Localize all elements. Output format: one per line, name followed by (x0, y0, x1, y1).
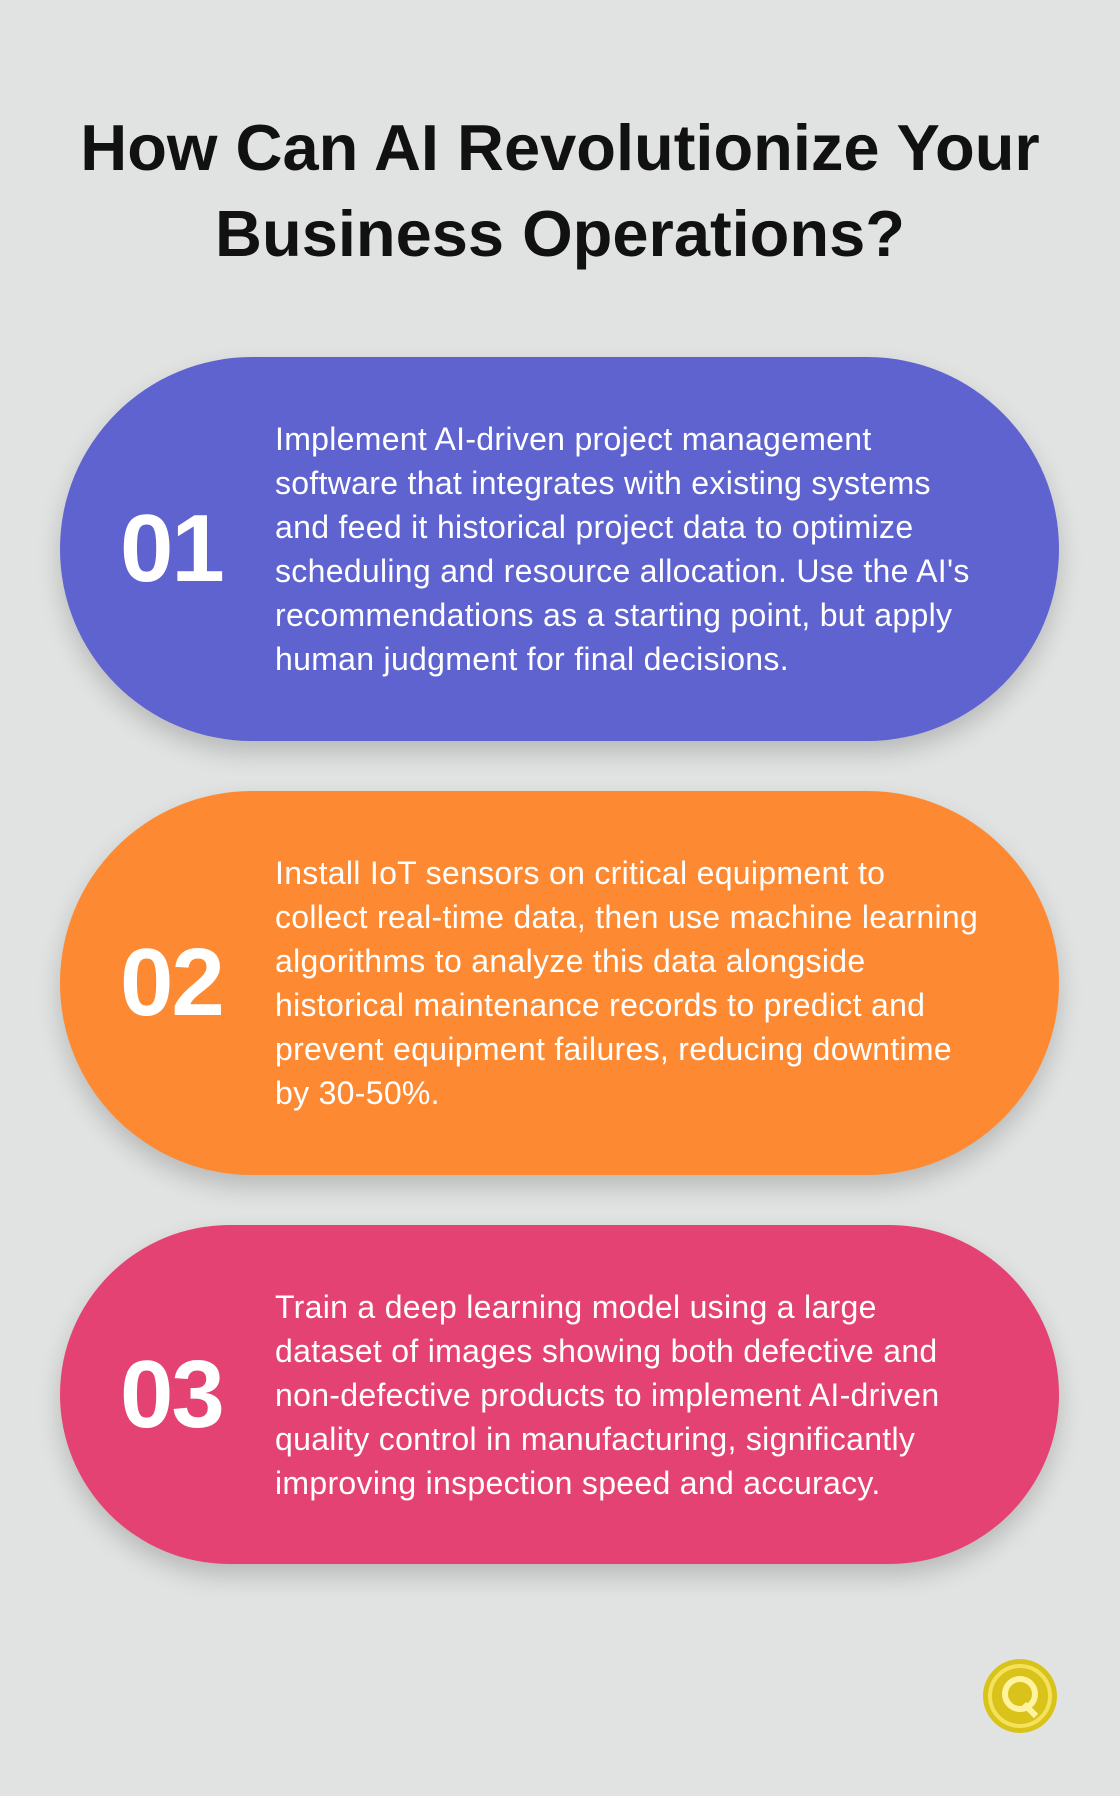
text 03: dataset of images showing both defective and (275, 1332, 938, 1368)
text 01: recommendations as a starting point, but apply (275, 597, 952, 633)
number 01: 01 (120, 495, 223, 602)
text 02: by 30-50%. (275, 1075, 440, 1111)
text 01: human judgment for final decisions. (275, 641, 789, 677)
panel: step 02 (60, 791, 1059, 1175)
text 02: Install IoT sensors on critical equipment to (275, 855, 885, 891)
title: Business Operations? (215, 197, 905, 270)
text 02: collect real-time data, then use machine learning (275, 899, 978, 935)
text 01: Implement AI-driven project management (275, 421, 872, 457)
text 03 (275, 1288, 940, 1500)
text 02: prevent equipment failures, reducing downtime (275, 1031, 952, 1067)
number 03: 03 (120, 1340, 223, 1448)
text 03: improving inspection speed and accuracy. (275, 1464, 881, 1500)
text 02: historical maintenance records to predict and (275, 987, 925, 1023)
icon: logo (983, 1659, 1057, 1733)
number 02: 02 (120, 929, 223, 1036)
title (80, 111, 1040, 270)
panel: step 03 (60, 1225, 1059, 1564)
text 01 (275, 421, 970, 677)
title: How Can AI Revolutionize Your (80, 111, 1040, 184)
text 03: quality control in manufacturing, significantly (275, 1420, 915, 1456)
text 02 (275, 855, 978, 1111)
text 03: Train a deep learning model using a large (275, 1288, 877, 1324)
panel: step 01 (60, 357, 1059, 741)
text 03: non-defective products to implement AI-driven (275, 1376, 940, 1412)
text 02: algorithms to analyze this data alongside (275, 943, 865, 979)
text 01: scheduling and resource allocation. Use the AI's (275, 553, 970, 589)
text 01: and feed it historical project data to optimize (275, 509, 913, 545)
text 01: software that integrates with existing systems (275, 465, 931, 501)
